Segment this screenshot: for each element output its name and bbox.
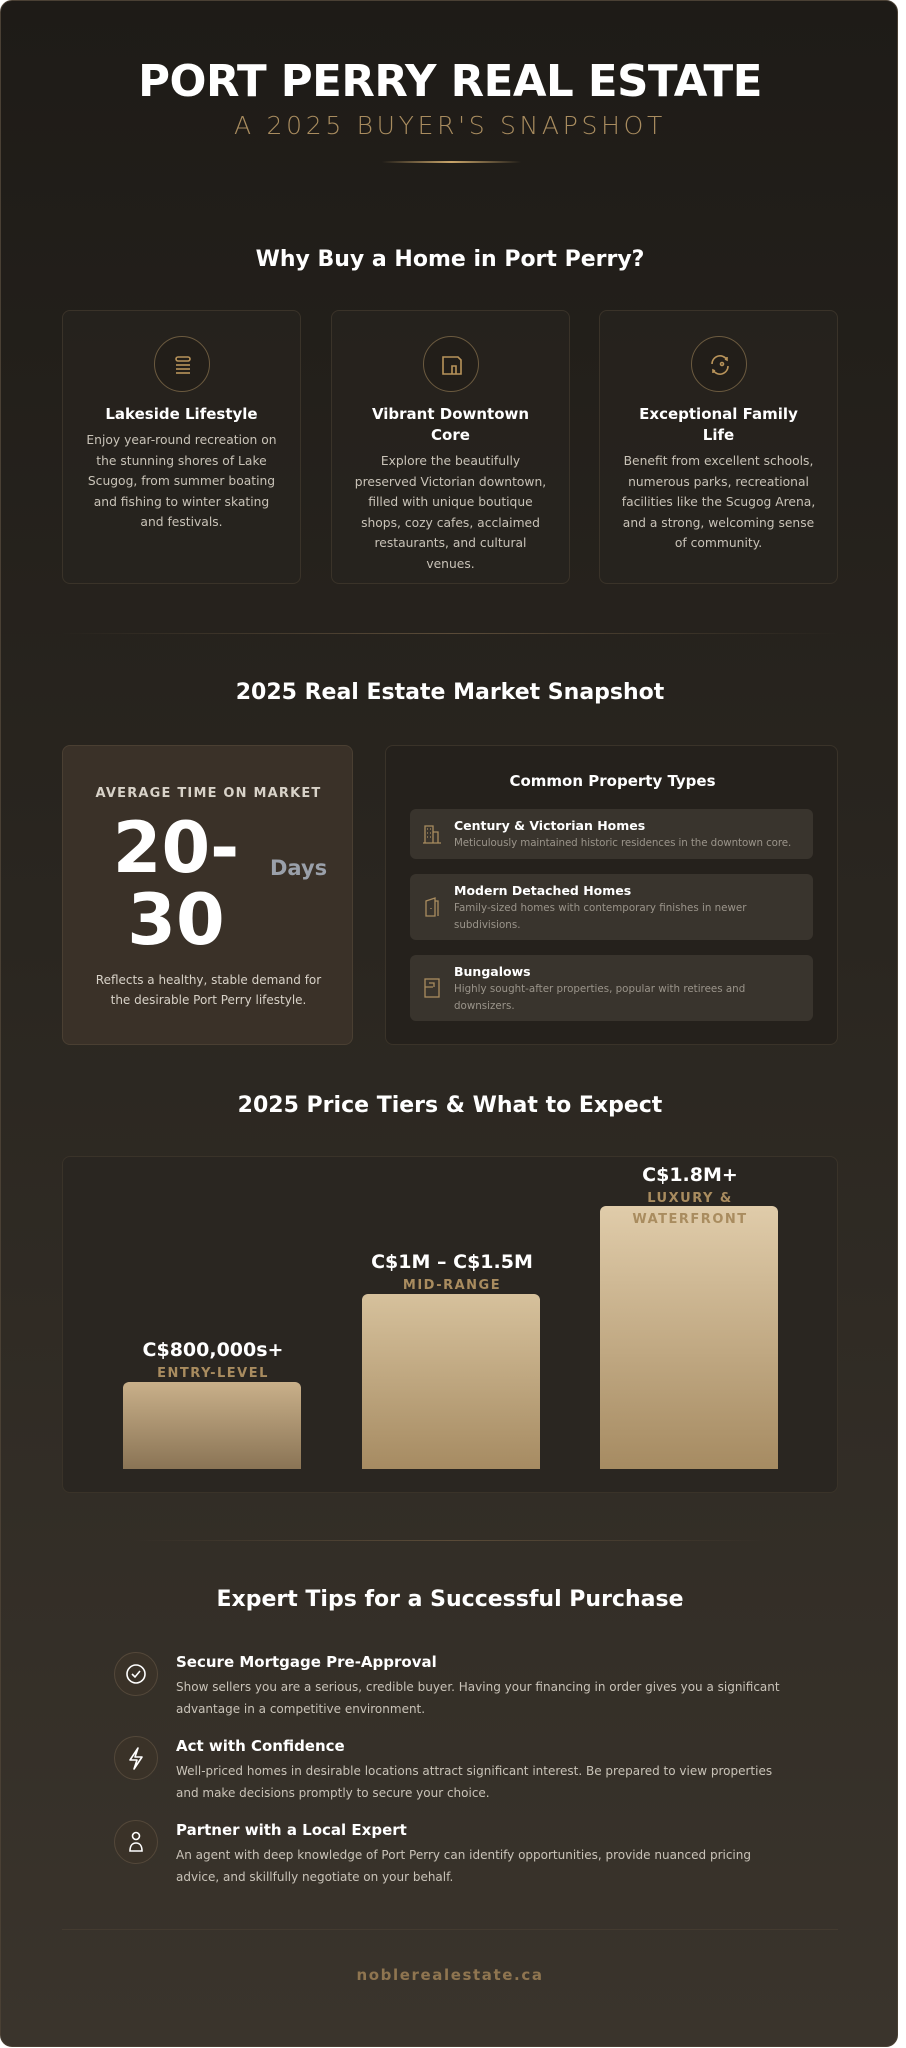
card: family: Benefit from excellent schools, numerous parks, recreational facilities like the Scugog Arena, and a strong, welcoming sense of community. bbox=[622, 454, 815, 550]
tip: local expert bbox=[114, 1820, 751, 1884]
icon: family bbox=[691, 336, 747, 392]
title: PORT PERRY REAL ESTATE bbox=[138, 57, 762, 107]
panel: time on market: Reflects a healthy, stable demand for the desirable Port Perry lifestyle. bbox=[96, 973, 321, 1007]
bar: entry bbox=[123, 1382, 301, 1469]
heading: why buy: Why Buy a Home in Port Perry? bbox=[256, 247, 644, 272]
bar: luxury bbox=[600, 1206, 778, 1469]
item: modern: Modern Detached Homes bbox=[454, 883, 631, 898]
icon: building bbox=[423, 336, 479, 392]
panel: property types bbox=[385, 745, 838, 1045]
footer: noblerealestate.ca bbox=[356, 1966, 544, 1984]
item: bungalows bbox=[410, 955, 813, 1021]
bar chart: C$1.8M+ bbox=[642, 1164, 738, 1186]
bar chart: C$1M – C$1.5M bbox=[371, 1251, 533, 1273]
tip: confidence: Act with Confidence bbox=[176, 1737, 345, 1755]
item: modern bbox=[410, 874, 813, 940]
tip: mortgage bbox=[114, 1652, 780, 1716]
card: downtown bbox=[331, 310, 570, 584]
heading: expert tips: Expert Tips for a Successful Purchase bbox=[216, 1587, 684, 1612]
tip: mortgage: Show sellers you are a serious, credible buyer. Having your financing in order gives you a significant advantage in a competitive environment. bbox=[176, 1680, 780, 1716]
stat number bbox=[113, 807, 239, 961]
bar chart: C$800,000s+ bbox=[143, 1339, 283, 1361]
tip: confidence: Well-priced homes in desirable locations attract significant interest. Be prepared to view properties and make decisions promptly to secure your choice. bbox=[176, 1764, 772, 1800]
card: family: Life bbox=[703, 426, 734, 444]
tip: confidence bbox=[114, 1736, 772, 1800]
bar chart: LUXURY & bbox=[647, 1191, 733, 1206]
card: downtown: Vibrant Downtown bbox=[372, 405, 529, 423]
card: lakeside bbox=[62, 310, 301, 584]
stat number: 30 bbox=[127, 879, 225, 961]
heading: price tiers: 2025 Price Tiers & What to Expect bbox=[238, 1093, 662, 1118]
card: family bbox=[599, 310, 838, 584]
card: family: Exceptional Family bbox=[639, 405, 798, 423]
heading: market snapshot: 2025 Real Estate Market Snapshot bbox=[236, 680, 664, 705]
bar chart bbox=[62, 1156, 838, 1493]
card: downtown: Core bbox=[431, 426, 470, 444]
item: century bbox=[410, 809, 813, 859]
panel: property types: Common Property Types bbox=[509, 772, 716, 790]
item: bungalows: Bungalows bbox=[454, 964, 531, 979]
tip: local expert: Partner with a Local Expert bbox=[176, 1821, 407, 1839]
tip: mortgage: Secure Mortgage Pre-Approval bbox=[176, 1653, 437, 1671]
panel: time on market bbox=[62, 745, 353, 1045]
card: downtown: preserved Victorian downtown, filled with unique boutique shops, cozy cafes, acclaimed restaurants, and cultural venues. bbox=[355, 474, 546, 570]
subtitle: A 2025 BUYER'S SNAPSHOT bbox=[234, 111, 666, 140]
panel: time on market: AVERAGE TIME ON MARKET bbox=[95, 786, 322, 801]
item: century: Century & Victorian Homes bbox=[454, 818, 645, 833]
panel: time on market: Days bbox=[270, 856, 327, 880]
item: century: Meticulously maintained historic residences in the downtown core. bbox=[454, 837, 791, 849]
item: modern: Family-sized homes with contemporary finishes in newer subdivisions. bbox=[454, 902, 747, 931]
bar chart: MID-RANGE bbox=[403, 1278, 501, 1293]
icon: lake bbox=[154, 336, 210, 392]
tip: local expert: An agent with deep knowledge of Port Perry can identify opportunities, provide nuanced pricing advice, and skillfully negotiate on your behalf. bbox=[176, 1848, 751, 1884]
card: lakeside: Enjoy year-round recreation on the stunning shores of Lake Scugog, from summer boating and fishing to winter skating and festivals. bbox=[86, 433, 277, 529]
item: bungalows: Highly sought-after properties, popular with retirees and downsizers. bbox=[454, 983, 745, 1012]
bar chart: WATERFRONT bbox=[632, 1212, 748, 1227]
bar chart: ENTRY-LEVEL bbox=[157, 1366, 269, 1381]
card: downtown: Explore the beautifully bbox=[381, 454, 520, 468]
card: lakeside: Lakeside Lifestyle bbox=[105, 405, 258, 423]
bar: mid bbox=[362, 1294, 540, 1469]
stat number: 20- bbox=[113, 807, 239, 889]
